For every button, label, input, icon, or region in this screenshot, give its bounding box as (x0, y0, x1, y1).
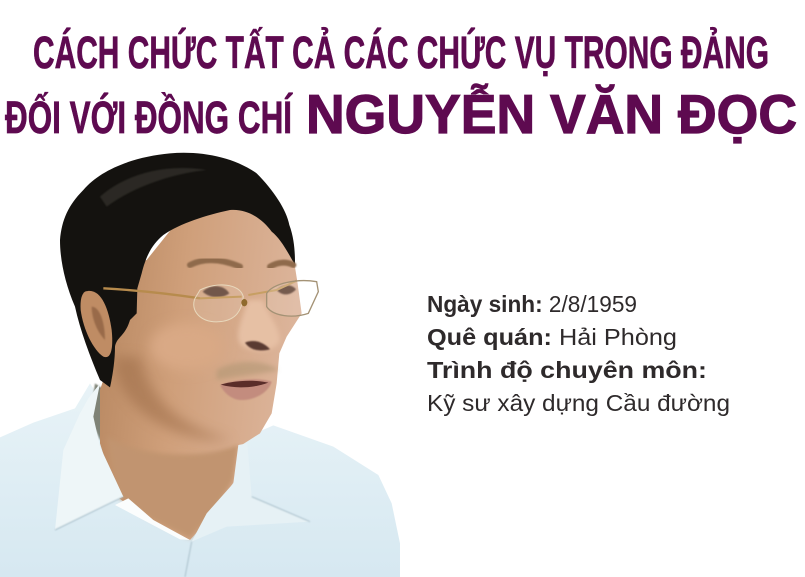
mouth opening (221, 381, 268, 387)
hair highlight (100, 168, 207, 207)
collar edges (55, 497, 310, 577)
jaw shading (113, 357, 233, 440)
hair (60, 153, 295, 387)
shadow at collar (90, 383, 113, 440)
neck and face (100, 190, 302, 540)
biography text (427, 291, 730, 416)
glasses (103, 281, 318, 322)
title name: NGUYỄN VĂN ĐỌC (306, 83, 797, 145)
qualification label: Trình độ chuyên môn: (427, 357, 707, 383)
inner ear (92, 307, 105, 340)
qualification: Kỹ sư xây dựng Cầu đường (427, 390, 730, 416)
hometown: Quê quán: Hải Phòng (427, 324, 677, 350)
nostril (245, 341, 270, 350)
shirt (0, 383, 400, 577)
birth date: Ngày sinh: 2/8/1959 (427, 291, 637, 317)
ear (81, 291, 112, 357)
bridge (200, 281, 297, 298)
eyebrows (190, 260, 293, 267)
nose pad (241, 299, 247, 306)
nose (238, 300, 280, 351)
title line 2 lead: ĐỐI VỚI ĐỒNG CHÍ (5, 92, 293, 143)
right lens (267, 281, 318, 316)
temple arm (103, 288, 200, 298)
collar right (192, 443, 310, 542)
eyes (203, 285, 296, 297)
undershirt (115, 498, 190, 540)
collar left (55, 383, 123, 530)
cheek highlight (150, 323, 223, 370)
portrait photo (0, 153, 400, 577)
moustache shadow (217, 362, 278, 380)
neck shadow (107, 437, 238, 538)
left lens (194, 285, 243, 322)
title (5, 27, 797, 145)
mouth (220, 379, 272, 400)
